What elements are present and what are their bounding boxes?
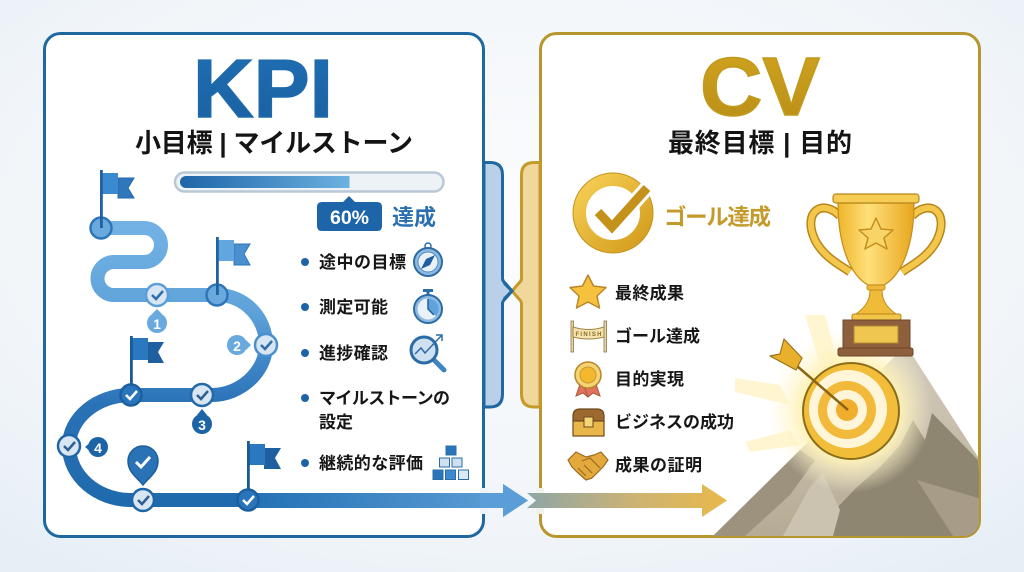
icon: medal [575, 362, 601, 397]
list item: 継続的な評価: 継続的な評価 [319, 454, 423, 473]
connector: gold bracket [512, 162, 540, 407]
icon: handshake [568, 452, 608, 480]
icon: goal check badge [573, 173, 653, 253]
checkpoint 3: 3 [198, 417, 206, 433]
icon: target with arrow [770, 339, 899, 459]
connector: crossing [504, 283, 512, 299]
arrow: KPI progress [255, 484, 528, 517]
icon: stopwatch [414, 289, 442, 323]
checkpoint 2: 2 [233, 338, 241, 354]
flag 2 [206, 237, 250, 306]
icon: finish banner: FINISH [576, 332, 602, 338]
KPI subtitle: 小目標 | マイルストーン [135, 128, 413, 158]
checkpoint 4: 4 [94, 440, 102, 456]
progress bar [175, 172, 444, 192]
mountain with glow [713, 315, 985, 540]
icon: finish banner [571, 321, 606, 352]
gaps around arrows [480, 488, 488, 514]
list item: マイルストーンの設定: マイルストーンの [319, 389, 450, 408]
list item: 測定可能: 測定可能 [319, 297, 388, 317]
list item: 進捗確認: 進捗確認 [319, 344, 388, 363]
arrowhead: KPI tip [480, 484, 528, 517]
icon: star [570, 275, 606, 308]
progress label: 達成 [392, 205, 436, 230]
icon: compass [414, 243, 442, 276]
progress badge: 60%: 60% [330, 207, 369, 229]
CV subtitle: 最終目標 | 目的 [668, 128, 852, 158]
checkpoint 5 with pin [128, 446, 158, 511]
list item: ビジネスの成功: ビジネスの成功 [615, 412, 734, 432]
flag 3 [120, 336, 164, 406]
list item: ゴール達成: ゴール達成 [615, 326, 700, 346]
panel: CV [540, 34, 985, 540]
heading: ゴール達成: ゴール達成 [664, 204, 771, 230]
icon: magnifier with chart [411, 335, 444, 370]
connector: blue bracket [484, 162, 512, 407]
flag 1 [90, 170, 134, 238]
icon: blocks [433, 446, 468, 480]
panel: KPI [44, 34, 528, 536]
list item: 途中の目標: 途中の目標 [319, 253, 406, 272]
KPI title: KPI [193, 42, 333, 135]
icon: treasure chest [573, 409, 604, 436]
milestone road [69, 228, 266, 500]
icon: trophy [811, 194, 941, 356]
arrow: to CV [527, 484, 727, 517]
CV title: CV [700, 40, 820, 133]
checkpoint 1 [146, 284, 168, 333]
flag 4 [238, 441, 281, 510]
list item: マイルストーンの設定 [301, 389, 450, 432]
checkpoint 2 [227, 334, 277, 356]
list item: マイルストーンの設定: 設定 [319, 413, 353, 432]
list item: 目的実現: 目的実現 [615, 370, 684, 389]
list item: 成果の証明: 成果の証明 [615, 455, 702, 475]
checkpoint 1: 1 [153, 316, 161, 332]
progress badge: 60% [317, 196, 382, 231]
list item: 最終成果: 最終成果 [615, 283, 684, 303]
checkpoint 4 [58, 435, 108, 457]
checkpoint 3 [191, 384, 213, 434]
